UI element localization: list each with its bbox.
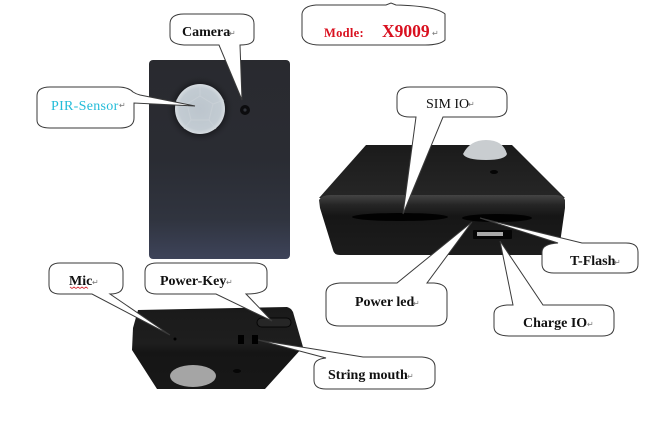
callout: Charge IO — [494, 241, 614, 336]
mic hole — [174, 338, 176, 340]
T-Flash slot — [462, 214, 532, 222]
top face — [319, 145, 565, 198]
callout: model: ↵ — [432, 29, 439, 38]
PIR dome — [170, 365, 216, 387]
callout: String mouth: String mouth — [328, 368, 408, 383]
callout: camera — [170, 14, 254, 100]
callout: Power led — [326, 222, 472, 326]
callout: T-Flash: T-Flash — [570, 254, 616, 269]
callout: Power-Key — [145, 263, 272, 321]
camera lens — [240, 105, 250, 115]
PIR sensor lens — [166, 75, 234, 143]
camera hole — [233, 369, 241, 373]
callout: T-Flash — [480, 218, 638, 273]
front face — [319, 195, 565, 255]
callout: model — [302, 3, 445, 45]
SIM slot — [352, 213, 448, 221]
device: front view — [149, 60, 290, 259]
callout: PIR-Sensor — [37, 87, 195, 128]
charge port — [473, 230, 512, 239]
callout: Charge IO: Charge IO — [523, 316, 587, 331]
callout: PIR-Sensor: ↵ — [119, 101, 126, 110]
spell-check squiggle — [70, 287, 88, 288]
callout: Mic — [49, 263, 170, 335]
callout: camera: Camera — [182, 25, 230, 40]
callout: String mouth — [258, 340, 435, 389]
callout: PIR-Sensor: PIR-Sensor — [51, 99, 119, 114]
callout: Power-Key: ↵ — [226, 278, 233, 287]
string mouth holes — [238, 335, 258, 344]
callout: SIM IO: ↵ — [468, 100, 475, 109]
callout: Power led: ↵ — [413, 299, 420, 308]
power key — [257, 318, 291, 327]
camera hole — [490, 170, 498, 174]
callout: Power-Key: Power-Key — [160, 274, 226, 289]
callout: camera: ↵ — [229, 29, 236, 38]
callout: String mouth: ↵ — [407, 372, 414, 381]
callout: SIM IO: SIM IO — [426, 97, 469, 112]
callout: Mic: ↵ — [92, 278, 99, 287]
callout: model: X9009 — [382, 21, 430, 41]
callout: T-Flash: ↵ — [614, 258, 621, 267]
callout: Charge IO: ↵ — [587, 320, 594, 329]
PIR dome — [463, 140, 507, 160]
callout: SIM IO — [397, 87, 507, 214]
callout: Mic: Mic — [69, 274, 92, 289]
device: top view with mic and key — [132, 307, 303, 389]
callout: model: Modle: — [324, 26, 364, 40]
callout: Power led: Power led — [355, 295, 414, 310]
device: side view with ports — [319, 140, 565, 255]
